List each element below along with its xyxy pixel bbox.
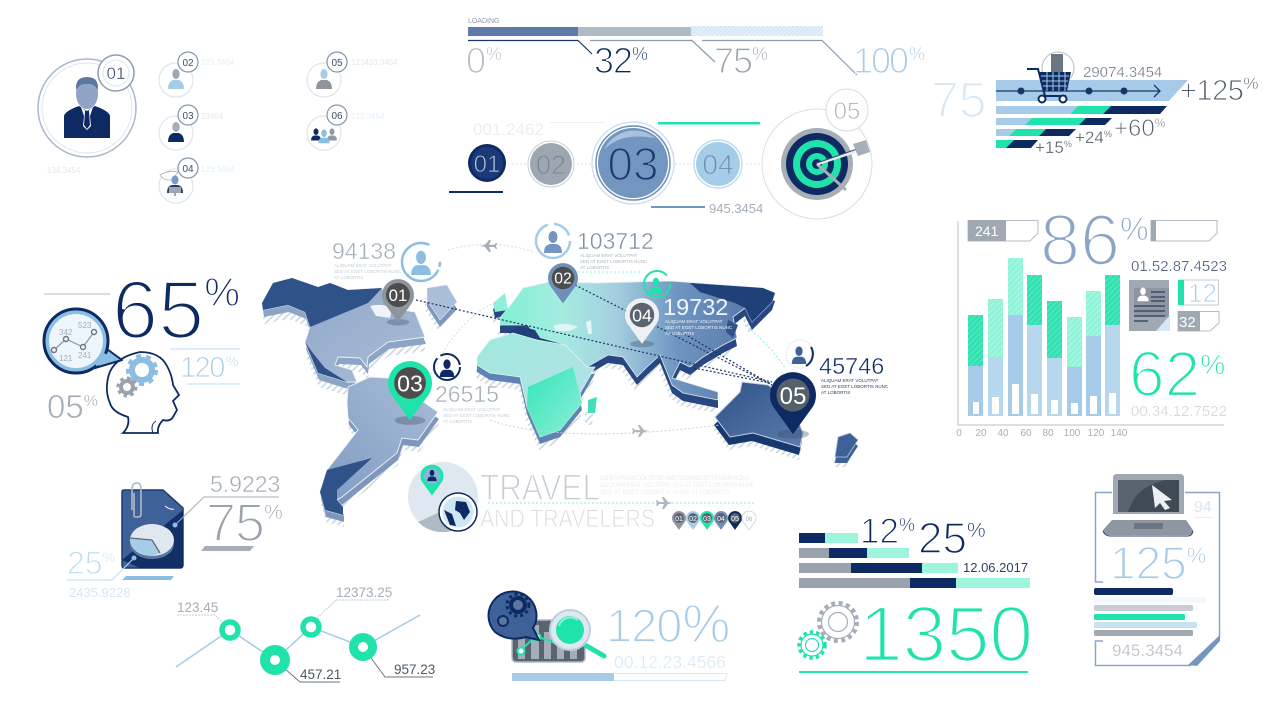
value 5.9223: 5.9223 <box>210 471 280 497</box>
icon: cart <box>1027 52 1074 102</box>
value 29074.3454: 29074.3454 <box>1083 64 1162 81</box>
value 75%: 75 <box>206 493 264 553</box>
marker: user 05 with value: ALIQUAM ERAT VOLUTPAT <box>821 378 879 383</box>
panel: laptop card <box>1094 474 1220 666</box>
bars <box>968 258 1120 416</box>
box 241: 241 <box>975 223 999 239</box>
box 32 <box>1178 311 1219 331</box>
value 2435.9228: 2435.9228 <box>69 585 130 600</box>
marker: user 01 with value: ALIQUAM ERAT VOLUTPAT <box>334 263 392 268</box>
labels: 12373.25 <box>336 585 392 600</box>
profile 06: 123.3454 <box>351 112 385 121</box>
connector dots <box>508 163 772 165</box>
speech bubble chart: 241 <box>78 351 92 360</box>
card outline <box>1096 492 1220 666</box>
rule <box>44 294 110 295</box>
step 02: 02 <box>536 150 566 180</box>
value 62%: 62 <box>1129 338 1200 410</box>
growth labels: +24 <box>1075 128 1104 147</box>
bars <box>799 533 1030 588</box>
connector lines <box>66 497 279 580</box>
pin 03: 03 <box>397 370 423 396</box>
marker: user 05 with value <box>786 340 889 395</box>
leader lines <box>177 600 390 628</box>
percent values: 0 <box>466 40 486 81</box>
icon: plane west <box>480 240 497 252</box>
pin 01 <box>382 279 414 325</box>
axis labels: 60 <box>1020 428 1032 439</box>
pale value: 001.2462 <box>473 120 544 139</box>
labels: 123.45 <box>177 600 218 615</box>
step 04 <box>694 140 742 188</box>
pin 05: 05 <box>780 383 806 410</box>
axes <box>958 221 1224 425</box>
bars <box>1094 588 1206 636</box>
date: 12.06.2017 <box>963 560 1028 575</box>
marker: user 01 with value: SED AT EGET LOBORTIS NUNC <box>334 269 402 274</box>
speech bubble chart: 523 <box>78 321 92 330</box>
profile 02 <box>159 52 198 97</box>
profile 03 <box>159 105 224 150</box>
profile 05: 05 <box>331 58 343 69</box>
step 03 <box>592 122 674 204</box>
value 75: 75 <box>931 72 987 128</box>
panel: analytics search <box>488 592 729 681</box>
progress bar <box>512 673 727 681</box>
loading label: LOADING <box>468 18 500 25</box>
badge 01: 01 <box>107 64 125 83</box>
axis labels: 40 <box>997 428 1009 439</box>
icon: document <box>1129 280 1170 331</box>
box 241 <box>968 220 1038 241</box>
value 05%: % <box>84 393 98 410</box>
marker: user 03 with value <box>434 354 511 424</box>
value 12%: % <box>899 515 915 535</box>
growth labels: % <box>1064 139 1072 149</box>
profile 03: 03 <box>182 111 194 122</box>
marker: user 01 with value: AT LOBORTIS <box>334 275 363 280</box>
flight arcs <box>420 244 785 434</box>
value 12%: 12 <box>860 512 899 551</box>
badge 01 <box>98 55 134 91</box>
leader lines <box>468 40 857 75</box>
profile 06 <box>307 105 385 150</box>
profile 04 <box>159 158 198 203</box>
axis labels: 0 <box>956 428 962 439</box>
icon: gear bubble <box>488 592 539 640</box>
marker: user 03 with value: SED AT EGET LOBORTIS NUNC <box>443 413 511 418</box>
empty progress box <box>1151 220 1217 241</box>
value 05%: 05 <box>47 388 84 425</box>
marker: user 02 with value <box>536 224 654 270</box>
value 125%: % <box>1187 543 1206 568</box>
percent values: % <box>486 44 502 64</box>
rule <box>799 671 1028 673</box>
pin 02 <box>548 263 578 304</box>
marker: user 04 with value: AT LOBORTIS <box>665 331 694 336</box>
dotted rule <box>488 502 755 504</box>
mini pin legend: 05 <box>731 516 739 523</box>
pale caption values: 123.3454 <box>201 58 235 67</box>
icon: target: 05 <box>834 98 860 125</box>
speech bubble chart: 342 <box>59 328 73 337</box>
speech bubble chart: 121 <box>59 354 73 363</box>
growth labels: +125 <box>1180 75 1243 107</box>
value 62%: % <box>1200 349 1225 380</box>
marker: user 04 with value <box>644 271 733 336</box>
profile 05 <box>307 52 398 97</box>
panel: stacked bars <box>799 512 1033 678</box>
step 01 <box>468 144 506 182</box>
step 02 <box>528 141 574 187</box>
marker: user 05 with value: 45746 <box>819 353 884 379</box>
value 1350: 1350 <box>859 589 1033 678</box>
value 125%: 125 <box>1110 537 1187 589</box>
marker: user 01 with value: 94138 <box>332 238 396 264</box>
marker: user 03 with value: AT LOBORTIS <box>443 419 472 424</box>
marker: user 02 with value: AT LOBORTIS <box>580 265 609 270</box>
mini pin legend <box>672 511 756 530</box>
marker: user 02 with value: ALIQUAM ERAT VOLUTPAT <box>580 253 638 258</box>
value time: 00.12.23.4566 <box>614 652 726 672</box>
percent values: 75 <box>714 40 752 81</box>
corner fold <box>1188 635 1220 666</box>
progress bar <box>468 26 823 36</box>
panel: travel title <box>408 462 756 533</box>
icon: magnifier <box>550 610 604 656</box>
pin 05 <box>770 372 816 439</box>
value 86%: 86 <box>1040 201 1120 281</box>
line <box>176 615 420 667</box>
step 04: 04 <box>702 149 734 180</box>
icon: plane <box>656 497 673 509</box>
speech bubble chart <box>44 309 122 373</box>
marker: user 05 with value: AT LOBORTIS <box>821 390 850 395</box>
panel: numbered steps <box>449 89 872 219</box>
icon: laptop <box>1103 474 1193 536</box>
bar blue <box>122 576 174 580</box>
icon: gears <box>799 603 857 658</box>
world map <box>262 224 889 527</box>
pin 02: 02 <box>554 271 572 288</box>
axis labels: 100 <box>1064 428 1081 439</box>
step 01: 01 <box>474 151 500 178</box>
axis labels: 140 <box>1111 428 1128 439</box>
axis labels: 120 <box>1088 428 1105 439</box>
bar gray <box>201 546 254 551</box>
percent values: % <box>632 44 648 64</box>
marker: user 02 with value: SED AT EGET LOBORTIS NUNC <box>580 259 648 264</box>
icon: target <box>762 89 872 219</box>
step 03: 03 <box>607 138 659 190</box>
title TRAVEL: TRAVEL <box>480 467 600 508</box>
mini pin legend: 06 <box>746 517 753 523</box>
value 65%: 65 <box>112 263 204 356</box>
pale description: LOREM IPSUM DOLOR SIT AMET CONSECTETUR ADIPISCING <box>600 476 750 482</box>
continent sides <box>263 285 858 522</box>
value 25%: 25 <box>67 545 103 581</box>
icon: head <box>107 352 179 433</box>
value 65%: % <box>204 271 240 315</box>
marker: user 03 with value: ALIQUAM ERAT VOLUTPAT <box>443 407 501 412</box>
icon: globe badge <box>408 462 478 532</box>
panel: bar chart <box>956 201 1227 439</box>
marker: user 04 with value: ALIQUAM ERAT VOLUTPAT <box>665 319 723 324</box>
labels <box>177 585 435 682</box>
labels: 457.21 <box>300 667 341 682</box>
growth labels: +60 <box>1114 115 1155 142</box>
mini pin legend: 01 <box>675 516 683 523</box>
mini pin legend: 03 <box>703 516 711 523</box>
value 120%: 120% <box>606 594 729 654</box>
percent values <box>466 40 925 81</box>
slanted bars <box>996 106 1167 148</box>
growth labels: +15 <box>1035 138 1064 157</box>
arrow banner <box>996 80 1188 101</box>
marker: user 04 with value: 19732 <box>663 294 728 320</box>
continent: new zealand <box>835 433 858 457</box>
profile 04: 04 <box>182 164 194 175</box>
icon: chart box <box>512 620 585 662</box>
pin 01: 01 <box>389 286 407 305</box>
panel: people list <box>38 52 398 203</box>
value 25%: % <box>967 519 986 542</box>
map hatch shadow <box>263 292 856 527</box>
continent: africa <box>477 326 597 444</box>
pale description: SED AT EGET LOBORTIS NUNC AT LOBORTIS <box>600 490 730 496</box>
profile 05: 123433.3454 <box>351 58 398 67</box>
pale description: ALIQUAM ERAT VOLUTPAT SED AT EGET LOBORTIS NUNC <box>600 483 756 489</box>
growth labels: % <box>1155 116 1166 130</box>
pale caption values: 134.3454 <box>47 166 81 175</box>
value 120%: 120 <box>180 352 224 384</box>
panel: shopping growth <box>931 52 1258 157</box>
marker: user 03 with value: 26515 <box>435 381 499 407</box>
pale caption values: 123.3454 <box>201 165 235 174</box>
value 945.3454: 945.3454 <box>709 201 763 216</box>
value 86%: % <box>1120 211 1149 247</box>
icon: plane east <box>632 425 649 437</box>
labels: 957.23 <box>394 662 435 677</box>
mini pin legend: 02 <box>689 516 697 523</box>
axis labels <box>956 428 1128 439</box>
axis labels: 80 <box>1042 428 1054 439</box>
pale description <box>600 476 756 496</box>
continent: australia <box>715 382 803 447</box>
panel: report pie <box>66 471 282 600</box>
box 12: 12 <box>1188 278 1217 308</box>
value 25%: % <box>103 549 115 565</box>
panel: line chart <box>176 585 435 682</box>
pin 03 <box>388 361 432 425</box>
panel: loading progress <box>466 18 925 81</box>
marker: user 01 with value <box>332 238 440 281</box>
box 32: 32 <box>1179 314 1196 331</box>
panel: mind analytics <box>44 263 240 433</box>
pale caption values <box>47 58 235 175</box>
percent values: % <box>909 44 925 64</box>
mini pin legend: 04 <box>717 516 725 523</box>
value time: 01.52.87.4523 <box>1131 258 1227 275</box>
route lines <box>416 285 772 385</box>
value time pale: 00.34.12.7522 <box>1131 403 1227 420</box>
continent: south america <box>320 377 438 515</box>
marker: user 02 with value: 103712 <box>577 228 654 254</box>
percent values: 32 <box>594 40 632 81</box>
value 25%: 25 <box>918 514 967 563</box>
marker: user 05 with value: SED AT EGET LOBORTIS NUNC <box>821 384 889 389</box>
profile 01 large circle <box>38 59 136 157</box>
pin 04 <box>625 298 659 347</box>
growth labels <box>1035 74 1258 157</box>
marker: user 04 with value: SED AT EGET LOBORTIS NUNC <box>665 325 733 330</box>
profile 06: 06 <box>331 111 343 122</box>
value 945.3454: 945.3454 <box>1112 641 1183 660</box>
value 120% <box>170 348 240 384</box>
icon: document with pie <box>122 483 183 568</box>
continent: north america <box>262 278 425 382</box>
title AND TRAVELERS: AND TRAVELERS <box>480 505 655 533</box>
value 94: 94 <box>1194 499 1212 516</box>
axis labels: 20 <box>975 428 987 439</box>
growth labels: % <box>1104 129 1112 139</box>
growth labels: % <box>1243 74 1258 93</box>
percent values: 100 <box>853 40 907 81</box>
profile 02: 02 <box>182 58 194 69</box>
value 120%: % <box>226 353 238 369</box>
percent values: % <box>752 44 768 64</box>
profile 03: 23454 <box>201 112 224 121</box>
pin 04: 04 <box>632 305 652 325</box>
accent lines <box>449 122 760 208</box>
continent: greenland <box>427 285 457 320</box>
value 75%: % <box>264 501 282 524</box>
nodes <box>222 619 372 670</box>
continent: eurasia <box>493 281 775 400</box>
